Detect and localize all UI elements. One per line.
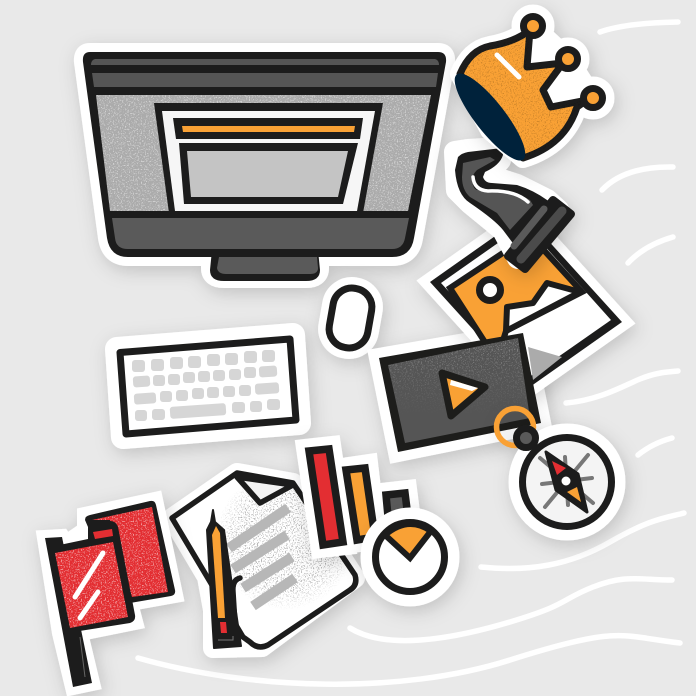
bar chart <box>305 445 412 549</box>
crown <box>445 5 614 169</box>
compass needle <box>546 452 587 512</box>
gray bar <box>386 493 409 527</box>
pie wedge <box>385 524 431 558</box>
browser window <box>154 103 383 213</box>
crown highlight <box>497 55 519 77</box>
video player halo <box>379 333 541 452</box>
monitor stand <box>210 250 320 281</box>
monitor body <box>83 52 446 257</box>
pie chart <box>361 508 459 606</box>
video player <box>379 333 541 452</box>
orange bar <box>346 468 375 540</box>
clamp <box>508 200 571 269</box>
photo picture <box>450 235 582 350</box>
crown base <box>445 65 535 169</box>
compass ring <box>496 408 534 446</box>
compass <box>496 408 625 540</box>
flags <box>45 500 175 687</box>
document text lines <box>229 508 295 606</box>
pen clip <box>233 578 240 640</box>
front flag <box>50 521 135 633</box>
monitor screen <box>96 95 431 211</box>
play button <box>442 373 485 416</box>
pencil <box>207 510 241 648</box>
lamp stalk and clamp <box>455 148 571 269</box>
flag highlights <box>75 553 103 618</box>
background waves <box>138 22 684 684</box>
flag pole <box>45 537 92 687</box>
document and pencil <box>172 473 357 648</box>
monitor <box>83 52 446 281</box>
document fold <box>237 477 293 503</box>
photo corner shade <box>528 347 562 380</box>
photo sun <box>480 280 500 300</box>
crown body <box>460 30 587 158</box>
back flag <box>85 501 175 603</box>
crown balls <box>524 16 542 36</box>
document sheet <box>172 473 356 647</box>
compass dial <box>522 438 612 526</box>
mouse <box>326 285 375 351</box>
red bar <box>309 449 343 545</box>
keyboard keys <box>132 350 280 421</box>
compass knob <box>516 428 536 448</box>
photo print <box>430 215 622 389</box>
keyboard <box>117 335 299 437</box>
